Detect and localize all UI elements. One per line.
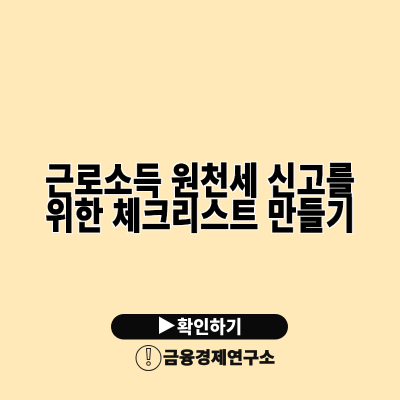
icon: exclamation circle	[136, 346, 161, 370]
title: 위한 체크리스트 만들기	[45, 196, 355, 237]
source label	[136, 346, 275, 370]
title	[45, 161, 355, 237]
title: 근로소득 원천세 신고를	[45, 161, 355, 202]
icon: play triangle	[159, 316, 175, 334]
button: 확인하기: 확인하기	[177, 316, 242, 338]
source label: 금융경제연구소	[163, 348, 275, 368]
button: 확인하기	[111, 314, 288, 340]
